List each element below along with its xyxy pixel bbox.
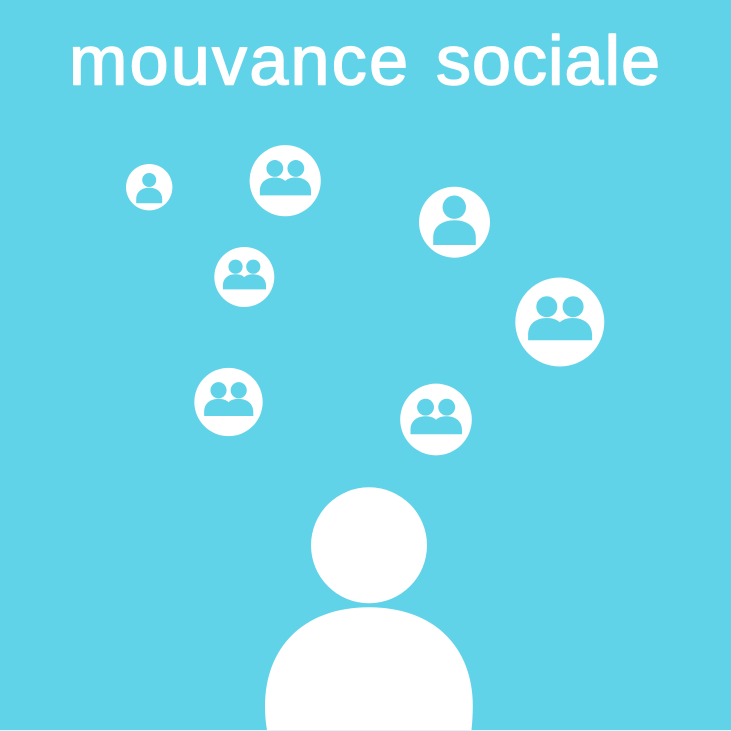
large person silhouette: [265, 487, 473, 730]
icon: single person small: [126, 164, 172, 210]
icon: group of two top: [250, 145, 321, 216]
icon: single person large: [419, 187, 490, 258]
icon: group of two lower centre: [400, 384, 472, 455]
icon: group of two lower left: [194, 368, 263, 436]
icon: group of two middle left: [214, 247, 274, 307]
icon: group of two large right: [515, 278, 604, 366]
title: mouvance: [69, 22, 408, 100]
title: sociale: [436, 22, 660, 100]
